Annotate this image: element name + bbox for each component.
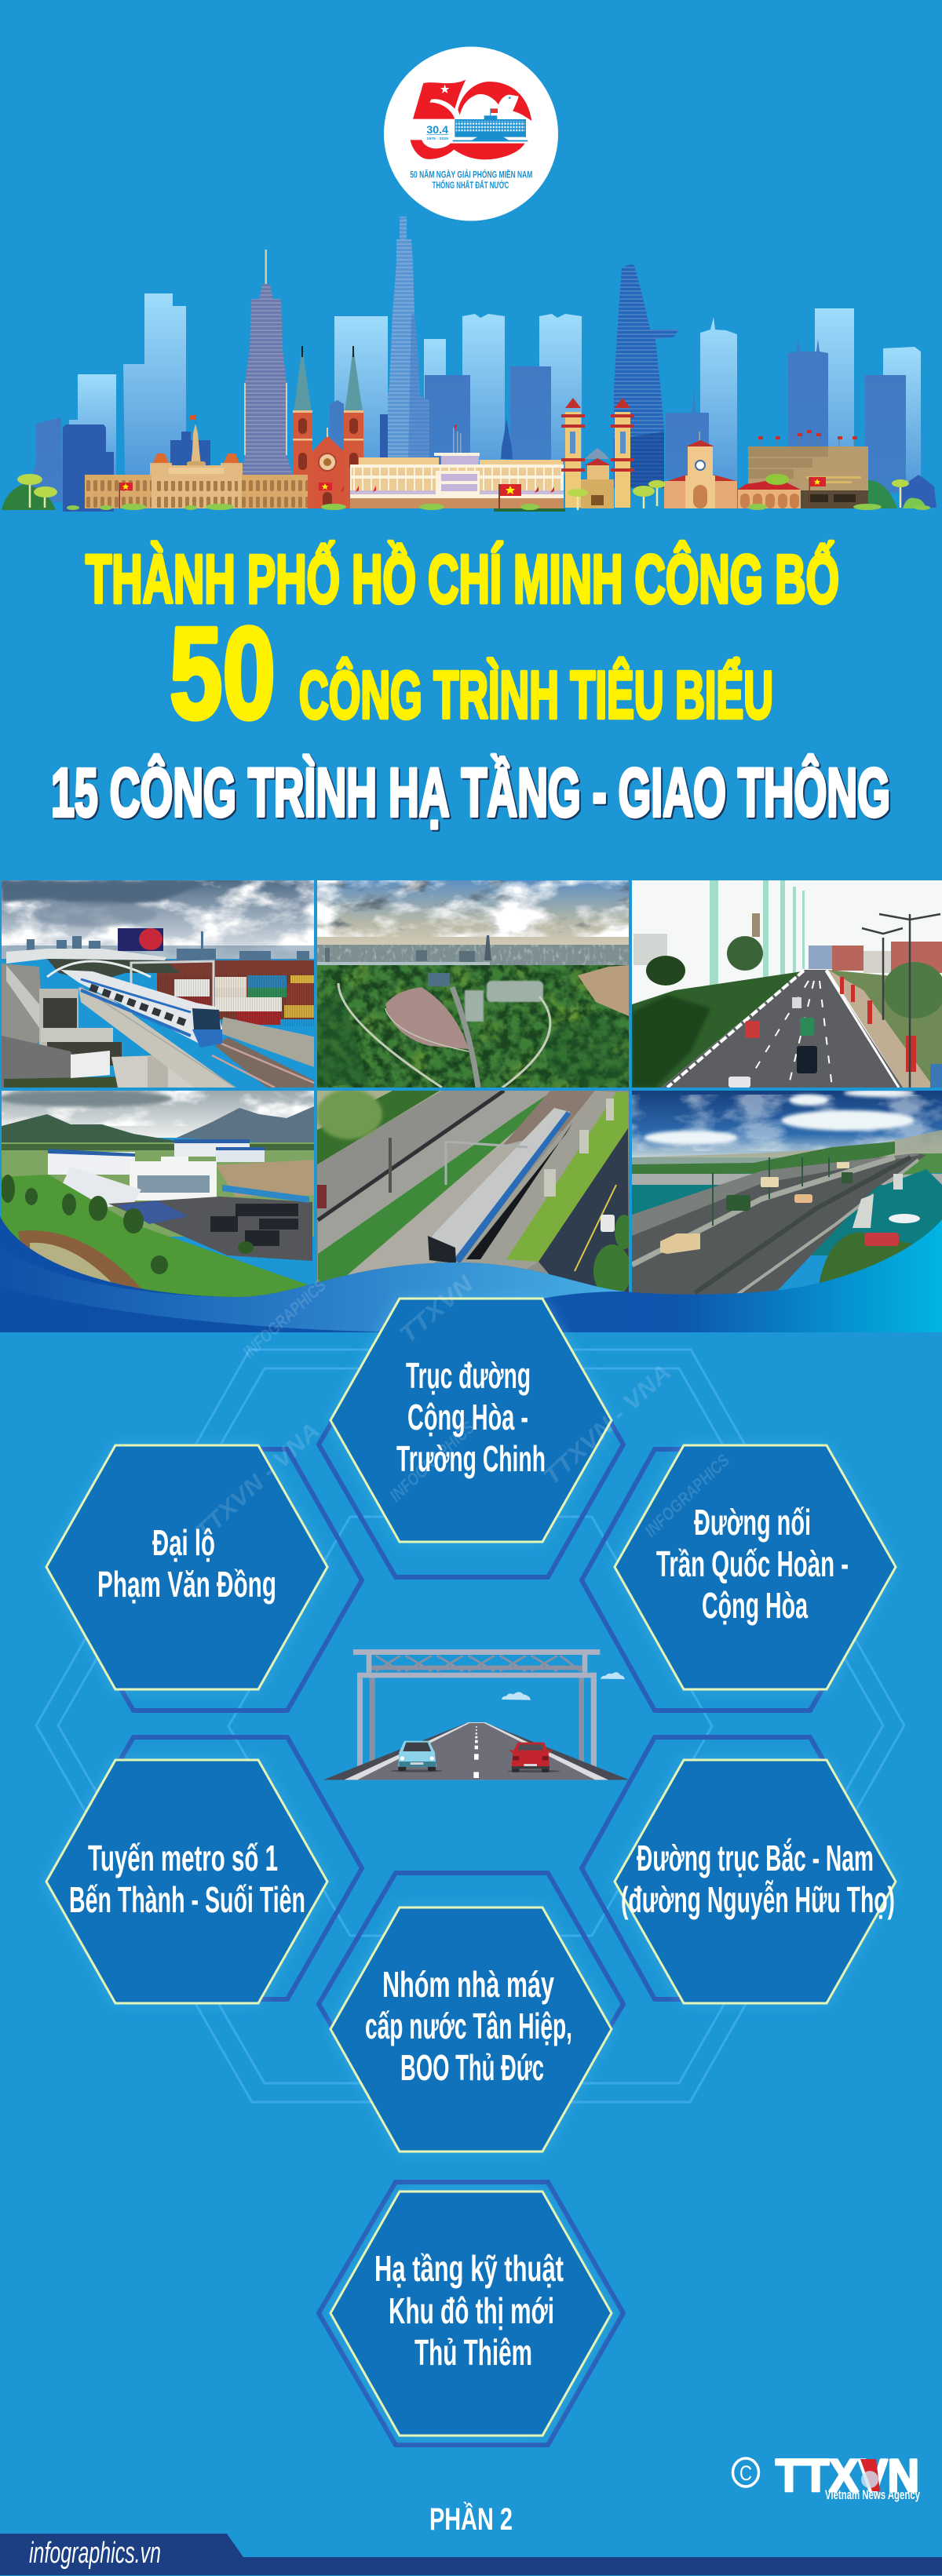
train bbox=[60, 970, 222, 1045]
hexagon: Đường nối Trần Quốc Hoàn - Cộng Hòa: Cộng Hòa bbox=[702, 1585, 808, 1626]
road illustration bbox=[323, 1649, 630, 1780]
footer band: infographics.vn bbox=[29, 2537, 161, 2570]
hexagon: Đường trục Bắc - Nam bbox=[615, 1760, 896, 2003]
logo: 50 years badge bbox=[384, 47, 558, 221]
blue car bbox=[398, 1741, 436, 1771]
ben thanh market bbox=[664, 432, 737, 508]
copyright TTXVN logo: TTXVN bbox=[776, 2450, 919, 2501]
hexagon glow bbox=[46, 1299, 896, 2436]
watermarks: TTXVN bbox=[395, 1270, 479, 1348]
badge caption: 50 NĂM NGÀY GIẢI PHÓNG MIỀN NAM bbox=[410, 169, 532, 180]
hexagon: Hạ tầng kỹ thuật Khu đô thị mới Thủ Thiêm bbox=[330, 2192, 612, 2436]
hexagon: Trục đường Cộng Hòa - Trường Chinh: Trường Chinh bbox=[396, 1438, 546, 1479]
numeral 5 and 0 in red bbox=[411, 80, 531, 159]
red car bbox=[509, 1743, 553, 1773]
hexagon: Đường nối Trần Quốc Hoàn - Cộng Hòa: Đường nối bbox=[694, 1502, 811, 1543]
hexagon: Nhóm nhà máy cấp nước: cấp nước Tân Hiệp, bbox=[365, 2006, 572, 2046]
photo: aerial Thu Thiem bbox=[317, 880, 632, 1088]
hexagon: Nhóm nhà máy cấp nước bbox=[330, 1907, 612, 2152]
watermarks: TTXVN - VNA bbox=[190, 1418, 325, 1546]
hexagon: Hạ tầng kỹ thuật Khu đô thị mới Thủ Thiêm: Hạ tầng kỹ thuật bbox=[374, 2248, 564, 2289]
faint background hexagons bbox=[36, 1350, 904, 2102]
tower: Vincom Landmark purple bbox=[242, 250, 293, 475]
hexagon: Trục đường Cộng Hòa - Trường Chinh bbox=[330, 1299, 612, 1542]
hexagon: Đại lộ Phạm Văn Đồng: Phạm Văn Đồng bbox=[97, 1564, 276, 1605]
hexagon: Đường nối Trần Quốc Hoàn - Cộng Hòa bbox=[615, 1445, 896, 1689]
date mark: 30.4 bbox=[426, 123, 448, 136]
watermarks bbox=[190, 1270, 733, 1546]
background light towers bbox=[69, 293, 921, 490]
logo: 50 years badge: THỐNG NHẤT ĐẤT NƯỚC bbox=[433, 179, 509, 191]
hexagon: Trục đường Cộng Hòa - Trường Chinh: Cộng Hòa - bbox=[407, 1397, 528, 1437]
wave banner bbox=[0, 1216, 942, 1332]
photo: overpass rendering bbox=[632, 1089, 942, 1303]
hexagon: Đại lộ Phạm Văn Đồng: Đại lộ bbox=[152, 1522, 215, 1563]
watermarks: INFOGRAPHICS bbox=[385, 1417, 479, 1506]
photo: water plant bbox=[0, 1090, 314, 1303]
plant buildings bbox=[174, 1142, 250, 1157]
containers bbox=[157, 960, 314, 1019]
footer band bbox=[0, 2534, 942, 2575]
hexagon: Nhóm nhà máy cấp nước: Nhóm nhà máy bbox=[382, 1964, 554, 2005]
title line 2 number: 50 bbox=[170, 601, 276, 746]
blue pagoda bbox=[501, 418, 513, 459]
museum building and flag bbox=[738, 430, 868, 508]
title bbox=[51, 541, 890, 831]
copyright TTXVN logo: C bbox=[739, 2461, 752, 2485]
watermarks: TTXVN - VNA bbox=[539, 1359, 677, 1490]
city hall bbox=[85, 414, 308, 508]
hexagon: Tuyến metro số 1: Tuyến metro số 1 bbox=[88, 1838, 278, 1878]
hexagon: Nhóm nhà máy cấp nước: BOO Thủ Đức bbox=[400, 2047, 544, 2088]
lawn and car park bbox=[2, 1175, 314, 1303]
palace emblem bbox=[453, 108, 528, 141]
hexagon: Tuyến metro số 1: Bến Thành - Suối Tiên bbox=[69, 1879, 305, 1920]
hexagon outlines behind bbox=[57, 1312, 885, 2445]
watermarks: INFOGRAPHICS bbox=[641, 1450, 733, 1541]
viaduct bbox=[78, 987, 236, 1088]
part label: PHẦN 2 bbox=[429, 2501, 513, 2537]
gantry bbox=[353, 1649, 600, 1770]
palm trees and greenery bbox=[2, 474, 930, 510]
hexagon: Hạ tầng kỹ thuật Khu đô thị mới Thủ Thiêm: Thủ Thiêm bbox=[414, 2332, 532, 2373]
train bbox=[466, 1122, 573, 1259]
photo: metro train aerial bbox=[316, 1089, 633, 1303]
tower: Landmark 81 bbox=[388, 217, 429, 463]
hexagon: Đại lộ Phạm Văn Đồng bbox=[46, 1445, 327, 1689]
photo: wide avenue bbox=[632, 880, 942, 1088]
tower: Bitexco bbox=[614, 264, 679, 488]
logo: 50 years badge: 1975 - 2025 bbox=[426, 137, 448, 140]
photo: metro station and containers bbox=[2, 880, 314, 1088]
background dark towers bbox=[24, 339, 906, 502]
road bbox=[323, 1722, 630, 1780]
watermarks: INFOGRAPHICS bbox=[239, 1275, 330, 1362]
hexagon: Tuyến metro số 1 bbox=[46, 1760, 327, 2003]
cathedral bbox=[293, 346, 363, 508]
hexagon: Hạ tầng kỹ thuật Khu đô thị mới Thủ Thiêm: Khu đô thị mới bbox=[389, 2290, 554, 2331]
station bbox=[6, 949, 166, 964]
hexagon: Trục đường Cộng Hòa - Trường Chinh: Trục đường bbox=[406, 1355, 531, 1396]
cao dai temple bbox=[561, 398, 634, 508]
independence palace bbox=[341, 424, 569, 512]
skyline illustration bbox=[2, 217, 937, 512]
clouds bbox=[502, 1672, 625, 1700]
